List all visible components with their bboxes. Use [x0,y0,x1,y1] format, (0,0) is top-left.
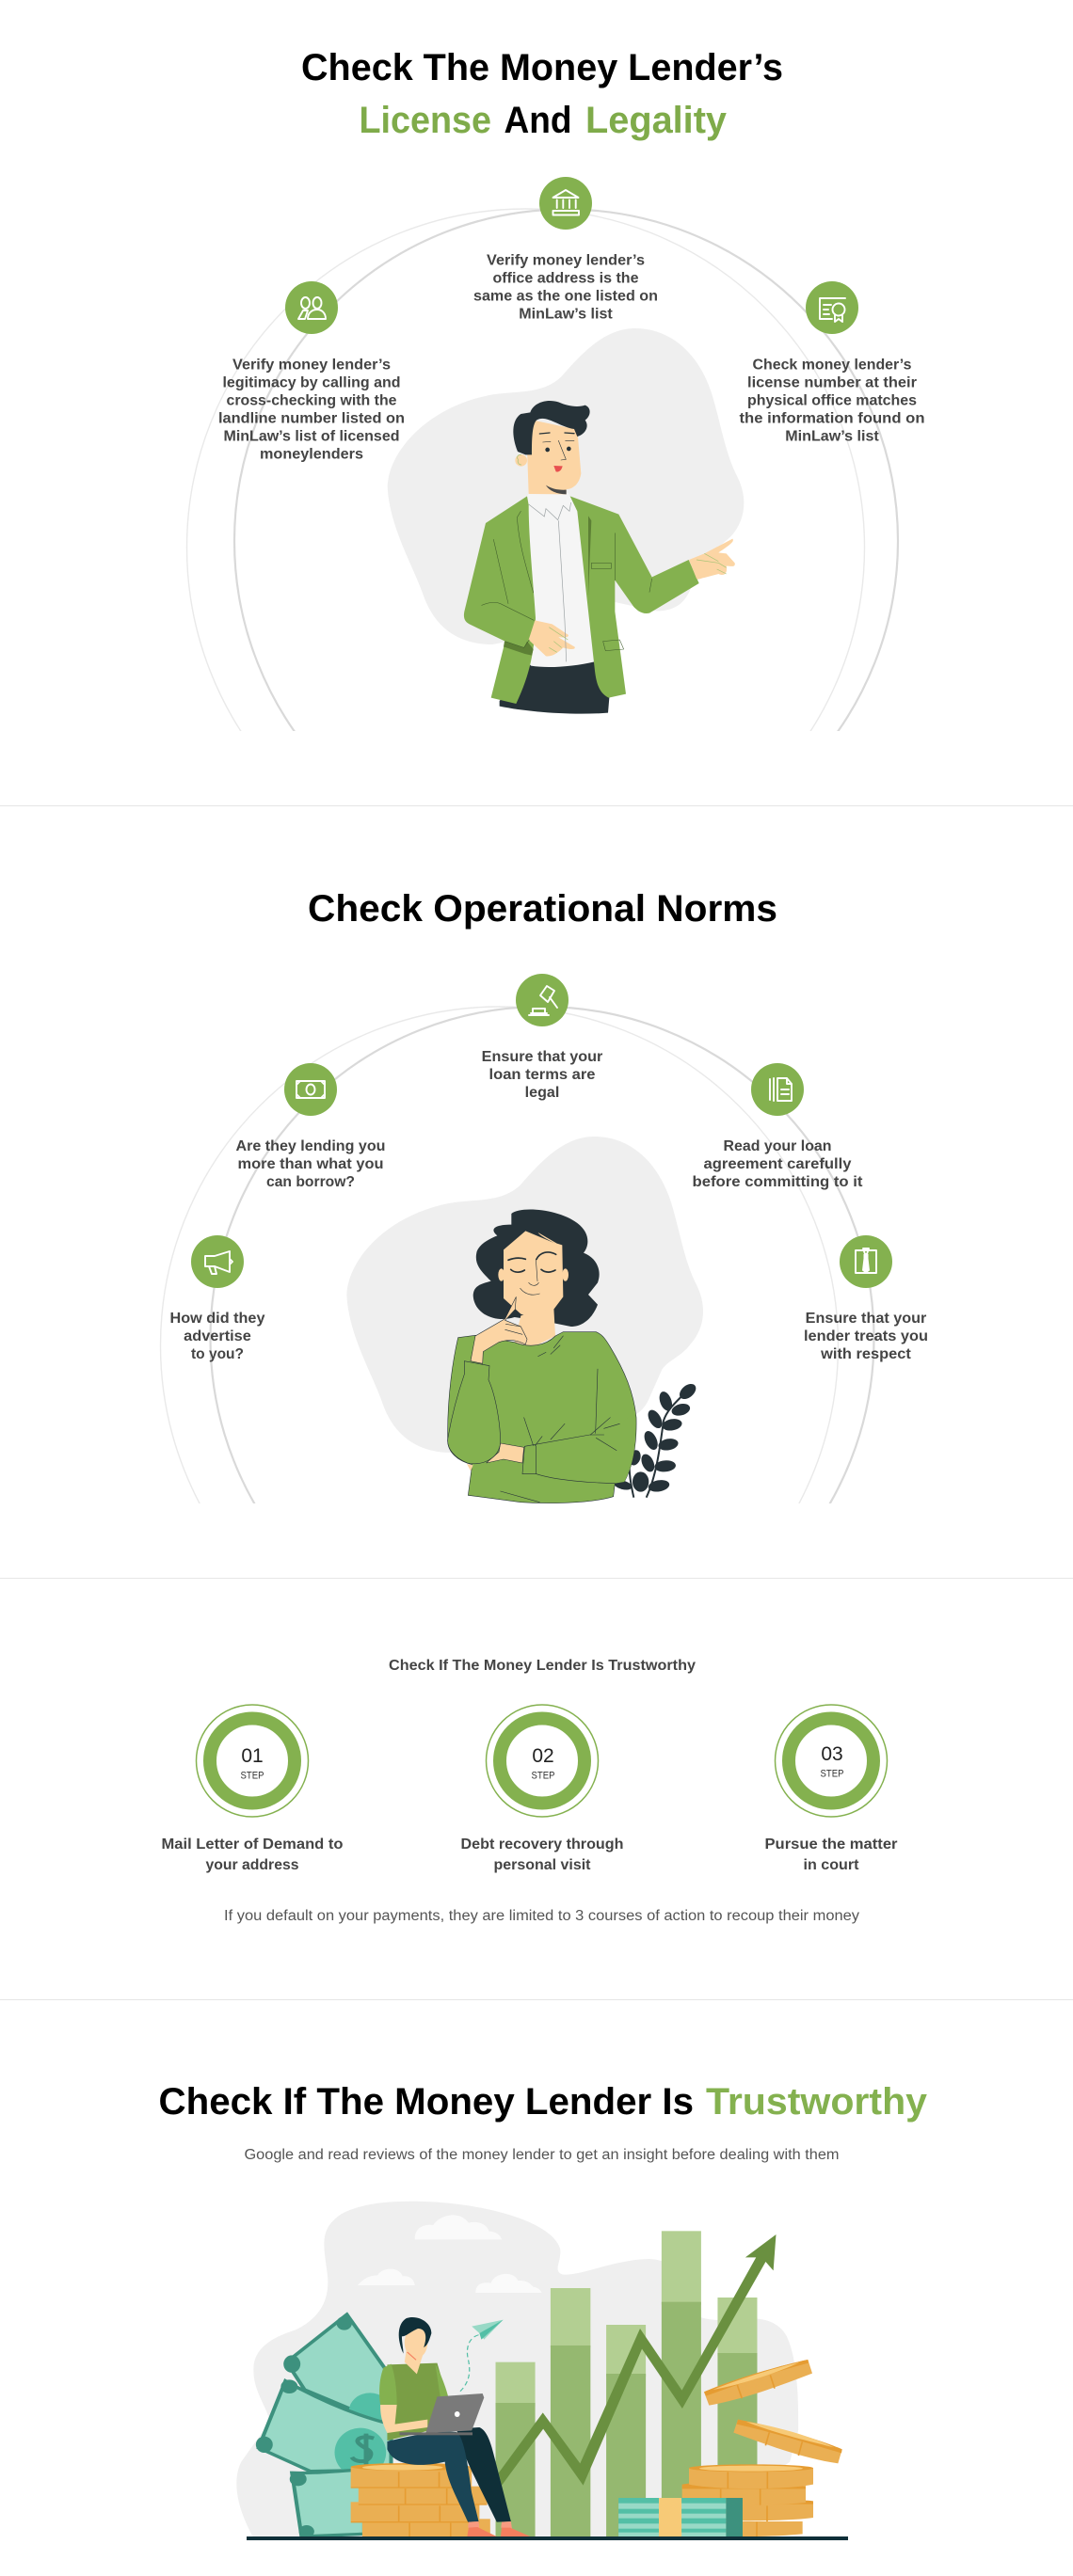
icon: gavel [516,974,569,1026]
text: how did they advertise: to you? [191,1346,244,1362]
text: lending more than you can borrow: more than what you [237,1156,384,1172]
step 01: your address [205,1857,299,1873]
illustration: thinking woman with plant on grey blob [346,1137,703,1503]
step 02: Debt recovery through [461,1837,623,1852]
step 03: Pursue the matter [764,1837,898,1852]
text: lending more than you can borrow: can borrow? [266,1174,355,1190]
text: check license number: Check money lender’s [753,358,911,373]
icon: bank building [539,177,592,230]
text: treats you with respect [804,1311,928,1362]
text: ensure loan terms legal [482,1049,602,1101]
title: check the money lender's license and legality [301,47,783,141]
step 02: 02 [532,1745,554,1767]
text: treats you with respect: with respect [820,1346,911,1362]
title: check the money lender's license and legality: And [504,100,572,141]
title: check the money lender's license and legality: License [360,100,491,141]
text: treats you with respect: lender treats you [804,1328,928,1344]
text: ensure loan terms legal: legal [525,1085,559,1101]
text: treats you with respect: Ensure that your [806,1311,926,1327]
text: verify office address: office address is the [493,271,639,286]
text: lending more than you can borrow [235,1138,386,1190]
step 01: STEP [241,1771,264,1782]
icon: license certificate [806,281,858,334]
step 02 [461,1705,623,1873]
text: read your loan agreement [693,1138,862,1190]
title: check the money lender's license and legality: Legality [585,100,728,141]
text: google reviews: Google and read reviews of the money lender to get an insight before dealing with them [245,2147,840,2163]
icon: people [285,281,338,334]
text: verify office address [473,252,658,322]
text: lending more than you can borrow: Are they lending you [235,1138,386,1154]
text: check license number [740,358,924,444]
icon: money note [284,1063,337,1116]
icon: suit and tie [840,1235,892,1288]
step 01: 01 [241,1745,264,1767]
text: verify legitimacy: moneylenders [260,446,363,463]
text: ensure loan terms legal: Ensure that your [482,1049,602,1065]
text: how did they advertise: How did they [169,1311,265,1327]
title: check if trustworthy [158,2081,928,2123]
text: default on payments note: If you default on your payments, they are limited to 3 courses of action to recoup their money [224,1908,859,1924]
panel: operational norms [160,894,927,1503]
icon: document [751,1063,804,1116]
text: check license number: license number at their [747,374,917,391]
text: read your loan agreement: Read your loan [723,1138,832,1154]
text: how did they advertise: advertise [184,1328,251,1344]
illustration: man pointing on grey blob [388,328,744,714]
text: check license number: the information found on [740,410,924,427]
text: verify legitimacy [218,358,405,463]
panel: three steps [162,1658,898,1924]
text: check license number: physical office matches [747,393,917,408]
text: verify legitimacy: MinLaw’s list of licensed [224,429,399,444]
text: read your loan agreement: agreement carefully [704,1156,852,1172]
title: check if trustworthy: Trustworthy [706,2081,928,2123]
text: verify legitimacy: legitimacy by calling and [222,374,401,391]
text: check license number: MinLaw’s list [785,429,879,444]
step 03 [764,1705,898,1873]
step 03: 03 [821,1743,843,1765]
text: verify office address: same as the one listed on [473,288,658,305]
step 02: personal visit [493,1857,591,1873]
illustration: investor on coins with growth chart [236,2202,848,2540]
step 01: Mail Letter of Demand to [162,1837,343,1852]
title: check if trustworthy: Check If The Money Lender Is [158,2081,694,2123]
text: verify office address: MinLaw’s list [519,307,613,322]
panel: reviews [158,2081,928,2540]
text: verify legitimacy: landline number listed on [218,410,405,427]
step 01 [162,1705,343,1873]
title: check operational norms: Check Operational Norms [308,888,777,930]
text: verify legitimacy: Verify money lender’s [232,358,391,373]
text: verify legitimacy: cross-checking with the [226,393,397,408]
title: check the money lender's license and legality: Check The Money Lender’s [301,47,783,88]
text: verify office address: Verify money lender’s [487,252,645,269]
text: how did they advertise [169,1311,265,1362]
text: ensure loan terms legal: loan terms are [489,1067,596,1083]
step 03: STEP [821,1769,843,1780]
panel: license and legality [186,53,924,731]
icon: megaphone [191,1235,244,1288]
step 02: STEP [531,1771,555,1782]
text: read your loan agreement: before committing to it [693,1174,862,1190]
heading: check if trustworthy: Check If The Money Lender Is Trustworthy [389,1658,696,1674]
step 03: in court [804,1857,858,1873]
